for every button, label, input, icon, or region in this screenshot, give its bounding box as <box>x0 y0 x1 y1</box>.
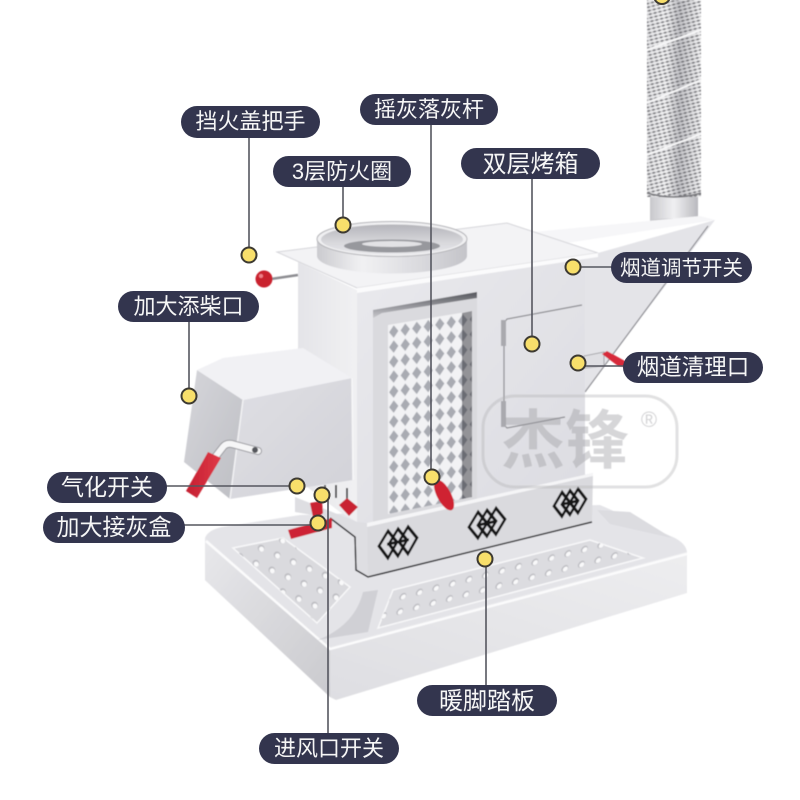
callout: feed port <box>118 291 259 404</box>
watermark: ® <box>641 407 657 432</box>
callout: oven: 双层烤箱 <box>482 151 578 178</box>
callout: gasifier switch <box>47 472 304 503</box>
diamond logo left <box>379 525 417 560</box>
callout: flue damper <box>566 252 752 283</box>
callout: oven <box>461 148 600 352</box>
callout: fire ring <box>273 156 411 232</box>
callout: air inlet switch: 进风口开关 <box>274 736 384 761</box>
watermark <box>483 396 677 487</box>
chimney top marker <box>654 0 670 4</box>
callout: gasifier switch: 气化开关 <box>61 474 153 500</box>
callout: shaker rod: 摇灰落灰杆 <box>374 97 484 122</box>
flue hood <box>533 216 715 392</box>
fire ring <box>317 222 467 274</box>
gasifier handle <box>186 444 258 498</box>
callout: flue damper: 烟道调节开关 <box>620 257 743 280</box>
damper knobs <box>310 485 358 522</box>
diamond logo right <box>554 487 586 518</box>
shaker lever <box>430 477 458 513</box>
callout: ash box: 加大接灰盒 <box>56 514 172 540</box>
callout: foot pedal: 暖脚踏板 <box>439 688 535 715</box>
callout: shaker rod <box>360 94 498 484</box>
watermark: 杰锋 <box>501 405 629 477</box>
callout: fire ring: 3层防火圈 <box>292 159 392 184</box>
callout: flue cleaning port <box>570 352 763 383</box>
callout: lid handle <box>181 106 320 262</box>
stove body <box>277 223 598 525</box>
callout: air inlet switch <box>259 488 399 764</box>
feed hopper <box>184 348 353 499</box>
oven door <box>501 305 582 428</box>
callout: feed port: 加大添柴口 <box>133 294 244 319</box>
chimney <box>647 0 701 224</box>
callout: foot pedal <box>417 552 557 716</box>
foot warming pedal base <box>205 505 687 700</box>
stove product illustration <box>184 0 715 700</box>
grate door with diamond mesh <box>373 292 477 524</box>
callout: flue cleaning port: 烟道清理口 <box>637 355 749 380</box>
callout: lid handle: 挡火盖把手 <box>195 109 306 134</box>
diamond logo centre <box>469 506 505 540</box>
ash box band <box>295 473 593 577</box>
ash box handle <box>288 518 332 539</box>
lid handle knob <box>256 270 298 288</box>
callout: ash box <box>43 512 326 543</box>
flue cleaning handle <box>584 351 625 368</box>
